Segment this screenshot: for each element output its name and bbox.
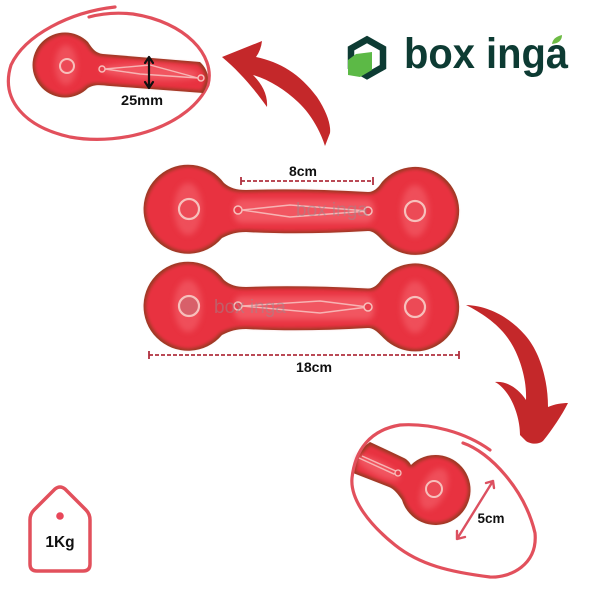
label: 25mm: 25mm xyxy=(121,93,163,108)
dumbbell: bottom inset xyxy=(353,442,471,525)
hand-drawn circle: top inset xyxy=(8,7,209,139)
label: 5cm: 5cm xyxy=(478,511,504,526)
tag outline xyxy=(30,487,90,571)
logo: box inga xyxy=(348,30,569,78)
watermark: box inga xyxy=(296,200,368,221)
panel: top inset handle thickness xyxy=(8,7,209,139)
icon: leaf accent xyxy=(552,35,562,44)
wordmark: box inga xyxy=(404,30,569,78)
panel: bottom inset ball diameter xyxy=(352,425,535,577)
dumbbell: top xyxy=(144,165,459,255)
arrow: top curved arrow xyxy=(222,41,330,146)
watermark: box inga xyxy=(214,297,286,318)
dumbbell: top inset xyxy=(33,32,208,98)
dimension: 18cm xyxy=(149,351,459,375)
label: 18cm: 18cm xyxy=(296,360,332,375)
double arrow: 5cm xyxy=(457,481,494,539)
tag: weight 1Kg xyxy=(30,487,90,571)
double arrow: 25mm xyxy=(145,57,153,88)
tag hole xyxy=(56,512,64,520)
arrow: bottom curved arrow xyxy=(466,305,568,444)
dimension: 8cm xyxy=(241,164,373,185)
icon: hexagon box xyxy=(348,40,383,77)
dumbbell: bottom xyxy=(144,262,459,351)
label: 8cm: 8cm xyxy=(289,164,317,179)
hand-drawn circle: bottom inset xyxy=(352,425,535,577)
label: 1Kg: 1Kg xyxy=(45,534,75,551)
